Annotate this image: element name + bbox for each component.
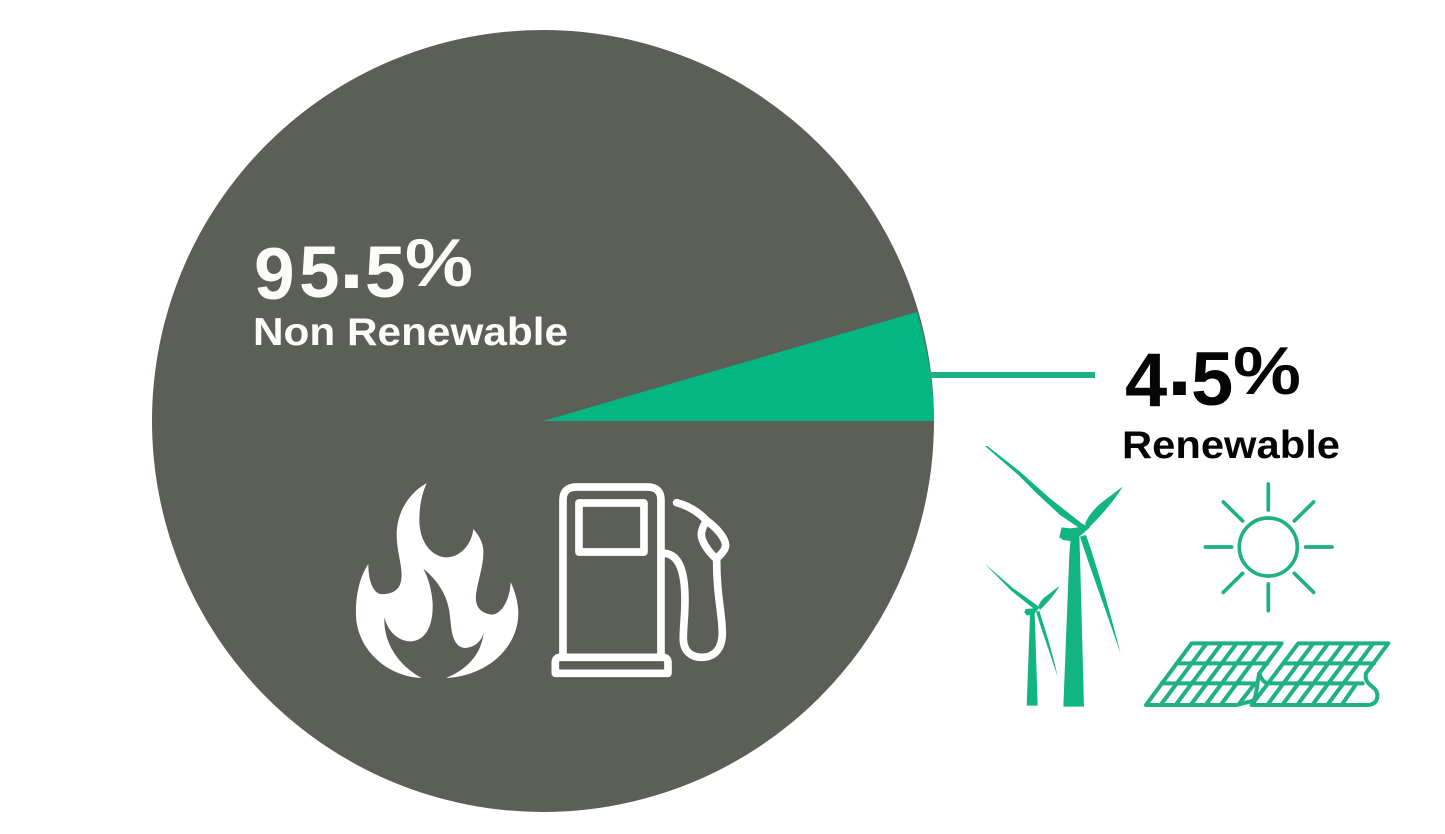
label: Renewable: Renewable [1122, 424, 1340, 467]
large turbine [985, 446, 1123, 707]
pump base [555, 657, 668, 673]
pie chart [152, 30, 934, 812]
label: 4.5%: 5 [1191, 337, 1233, 422]
pie slice: non renewable 95.5% [152, 30, 934, 812]
icon: solar panels [1146, 643, 1388, 705]
label: 95.5%: . [339, 208, 364, 308]
icon: sun [1205, 484, 1332, 611]
label: 95.5%: % [405, 225, 473, 301]
connector line [930, 372, 1095, 378]
pump body [563, 487, 661, 657]
pump screen [579, 503, 644, 552]
small turbine [984, 563, 1059, 706]
label: 4.5%: 4 [1125, 338, 1167, 423]
icon: wind turbines [984, 446, 1123, 707]
left panel [1146, 643, 1282, 705]
pie slice: renewable 4.5% [543, 312, 934, 421]
pump hose [665, 553, 722, 657]
label: 4.5%: . [1167, 315, 1192, 415]
label: Non Renewable: Non Renewable [253, 311, 568, 354]
panel fold [1259, 673, 1269, 683]
icon: flame [356, 483, 518, 678]
right panel [1252, 643, 1388, 705]
pump nozzle [677, 503, 726, 558]
icon: fuel pump [555, 487, 726, 673]
label: 95.5%: 5 [365, 232, 406, 313]
label: 95.5%: 5 [299, 232, 340, 313]
label: 4.5%: % [1233, 333, 1301, 409]
label: 95.5%: 9 [254, 234, 295, 315]
